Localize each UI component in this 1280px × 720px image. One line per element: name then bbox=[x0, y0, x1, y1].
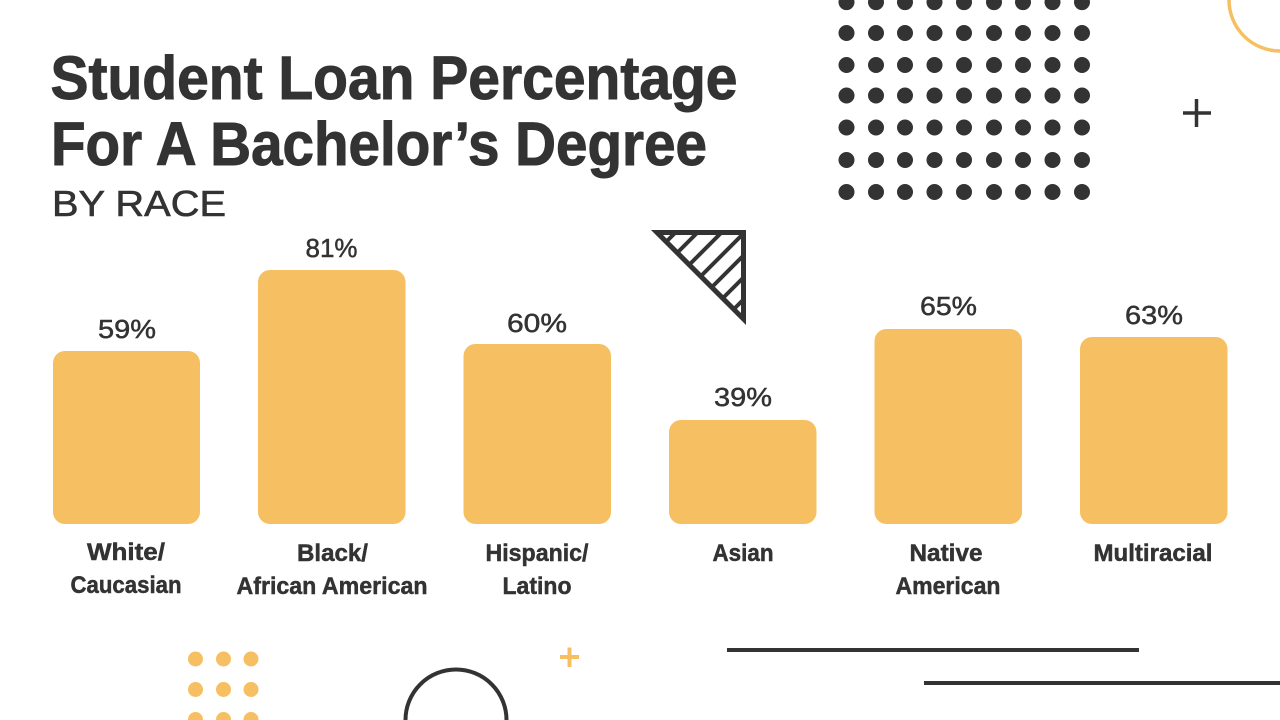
bar: Hispanic/Latino 60%: 60% bbox=[507, 308, 567, 338]
bar: Multiracial 63% bbox=[1080, 300, 1228, 567]
icon: yellow plus bbox=[560, 648, 579, 667]
subtitle: BY RACE bbox=[52, 183, 226, 224]
bar: Asian 39% bbox=[669, 382, 816, 567]
bar chart bbox=[53, 233, 1228, 600]
bar: White/Caucasian 59%: White/ bbox=[87, 539, 165, 566]
icon: dark plus bbox=[1183, 99, 1211, 127]
bar: Black/African American 81%: African American bbox=[236, 573, 428, 600]
bar: Hispanic/Latino 60% bbox=[464, 308, 611, 600]
bar: White/Caucasian 59%: 59% bbox=[98, 314, 156, 344]
bar: Multiracial 63%: Multiracial bbox=[1094, 540, 1212, 567]
bar: Black/African American 81%: 81% bbox=[306, 233, 358, 263]
bar: Native American 65%: American bbox=[896, 573, 1000, 600]
bar: Hispanic/Latino 60%: Hispanic/ bbox=[486, 540, 589, 567]
bar: Asian 39%: 39% bbox=[714, 382, 772, 412]
decorative dark dot grid bbox=[838, 0, 1090, 200]
bar: Native American 65%: 65% bbox=[920, 291, 977, 321]
bar: Black/African American 81% bbox=[236, 233, 428, 600]
bar: White/Caucasian 59% bbox=[53, 314, 200, 599]
bar: Black/African American 81%: Black/ bbox=[297, 540, 368, 567]
bar: Hispanic/Latino 60%: Latino bbox=[502, 573, 572, 600]
bar: Native American 65%: Native bbox=[910, 540, 982, 567]
title: For A Bachelor’s Degree bbox=[51, 110, 707, 178]
bar: White/Caucasian 59%: Caucasian bbox=[70, 572, 182, 599]
decorative dark circle bottom bbox=[406, 670, 506, 720]
bar: Asian 39%: Asian bbox=[712, 540, 774, 567]
title bbox=[50, 44, 738, 178]
decorative line upper bbox=[727, 648, 1139, 652]
decorative yellow dot grid bbox=[188, 652, 258, 720]
title: Student Loan Percentage bbox=[50, 44, 738, 112]
bar: Multiracial 63%: 63% bbox=[1125, 300, 1183, 330]
icon: hatched triangle bbox=[657, 232, 744, 319]
bar: Native American 65% bbox=[874, 291, 1022, 600]
decorative line lower bbox=[924, 681, 1280, 685]
decorative yellow arc top right bbox=[1229, 0, 1280, 51]
